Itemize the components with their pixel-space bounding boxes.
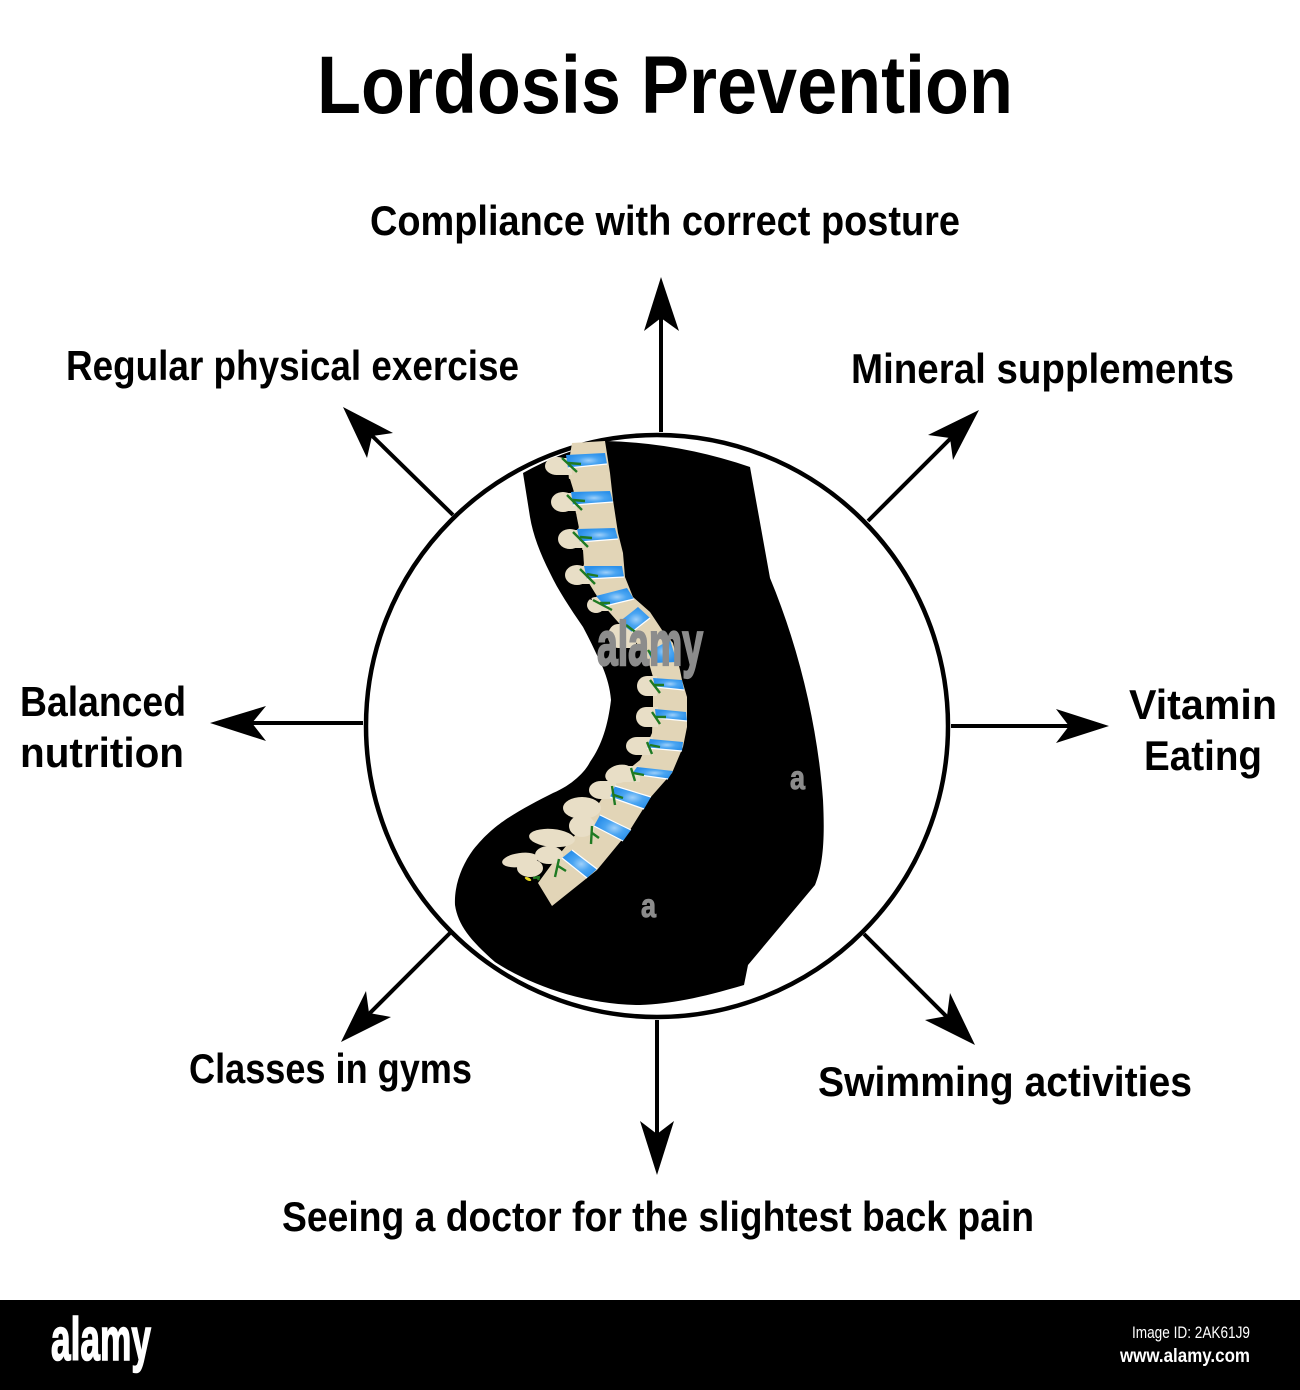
footer bar xyxy=(0,1300,1300,1390)
spinous processes xyxy=(501,457,658,877)
black notches between processes xyxy=(557,477,592,600)
vertebral column xyxy=(538,441,687,906)
watermark: alamy centre: alamy xyxy=(597,610,703,679)
arrow: lower right xyxy=(864,934,975,1045)
label: balanced nutrition: Balanced xyxy=(20,678,186,725)
label: seeing a doctor: Seeing a doctor for the slightest back pain xyxy=(282,1193,1034,1240)
label: swimming activities: Swimming activities xyxy=(818,1058,1192,1105)
label: balanced nutrition xyxy=(20,678,186,776)
body silhouette xyxy=(455,441,824,1005)
label: vitamin eating xyxy=(1129,681,1277,779)
arrow: up xyxy=(644,277,679,432)
spine xyxy=(501,441,687,906)
label: classes in gyms: Classes in gyms xyxy=(189,1045,472,1092)
label: regular physical exercise: Regular physical exercise xyxy=(66,342,519,389)
label: mineral supplements: Mineral supplements xyxy=(851,345,1234,392)
arrow: down xyxy=(640,1020,674,1175)
website: www.alamy.com xyxy=(1119,1346,1250,1367)
arrow: right xyxy=(951,709,1109,743)
arrow: upper left xyxy=(343,407,453,515)
illustration: circle with spine xyxy=(366,435,948,1017)
arrow: upper right xyxy=(868,410,979,521)
label: vitamin eating: Eating xyxy=(1144,732,1262,779)
footer logo: alamy xyxy=(51,1306,151,1373)
intervertebral discs xyxy=(562,453,687,878)
circle outline xyxy=(366,435,948,1017)
spinal nerves xyxy=(533,458,666,880)
arrow: lower left xyxy=(341,933,450,1042)
label: balanced nutrition: nutrition xyxy=(20,729,184,776)
disc edge lines xyxy=(562,464,687,878)
watermark: small a lower: a xyxy=(641,887,657,924)
label: compliance with correct posture: Compliance with correct posture xyxy=(370,197,960,244)
image id: Image ID: 2AK61J9 xyxy=(1132,1323,1250,1342)
watermark: small a right: a xyxy=(790,759,806,796)
arrow: left xyxy=(210,706,363,741)
yellow nerve tip xyxy=(524,876,532,882)
label: vitamin eating: Vitamin xyxy=(1129,681,1277,728)
title: Lordosis Prevention xyxy=(317,40,1013,131)
